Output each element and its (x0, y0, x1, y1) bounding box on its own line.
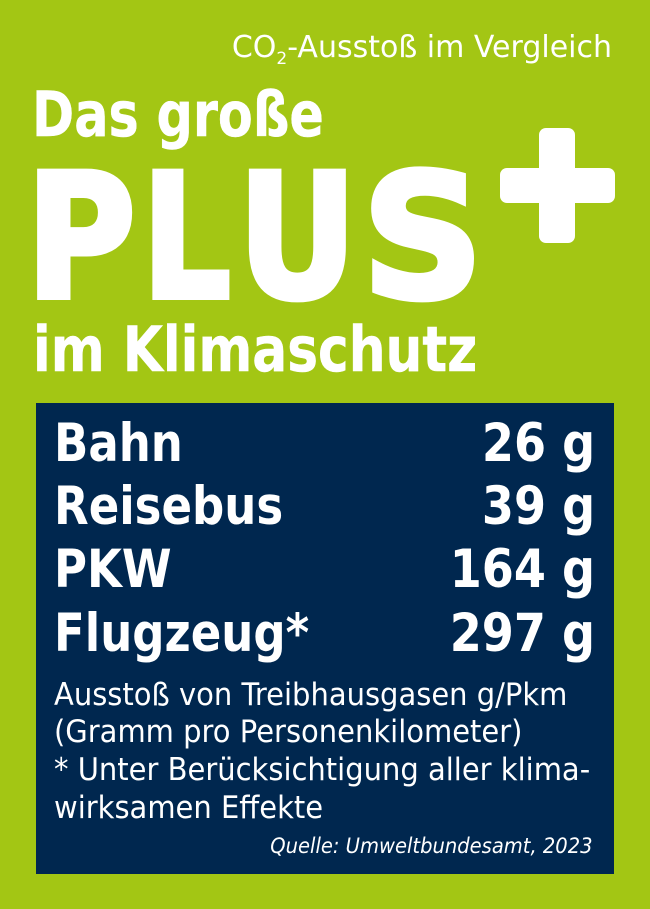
row label: Reisebus: Reisebus (54, 476, 283, 537)
explanatory note: wirksamen Effekte (54, 790, 323, 826)
row value: Bahn: 26 g (482, 413, 595, 474)
explanatory note (54, 676, 590, 826)
heading: PLUS: P (26, 137, 136, 338)
heading: Das große: Das große (32, 78, 324, 151)
row label: Bahn: Bahn (54, 413, 183, 474)
heading: PLUS: U (238, 137, 357, 338)
heading: PLUS (26, 137, 483, 338)
heading: PLUS: S (362, 137, 483, 338)
panel: emissions table (36, 403, 614, 874)
explanatory note: (Gramm pro Personenkilometer) (54, 714, 522, 750)
explanatory note: Ausstoß von Treibhausgasen g/Pkm (54, 676, 567, 712)
heading: im Klimaschutz: im Klimaschutz (33, 313, 477, 386)
row value: Flugzeug: 297 g (450, 603, 595, 664)
row value: PKW: 164 g (450, 539, 595, 600)
row label: Flugzeug: Flugzeug* (54, 603, 309, 664)
subtitle: CO2-Ausstoß im Vergleich (232, 30, 612, 69)
source: Quelle: Umweltbundesamt, 2023 (271, 834, 593, 858)
row value: Reisebus: 39 g (482, 476, 595, 537)
explanatory note: * Unter Berücksichtigung aller klima- (54, 752, 590, 788)
heading: PLUS: L (142, 137, 231, 338)
row label: PKW: PKW (54, 539, 172, 600)
